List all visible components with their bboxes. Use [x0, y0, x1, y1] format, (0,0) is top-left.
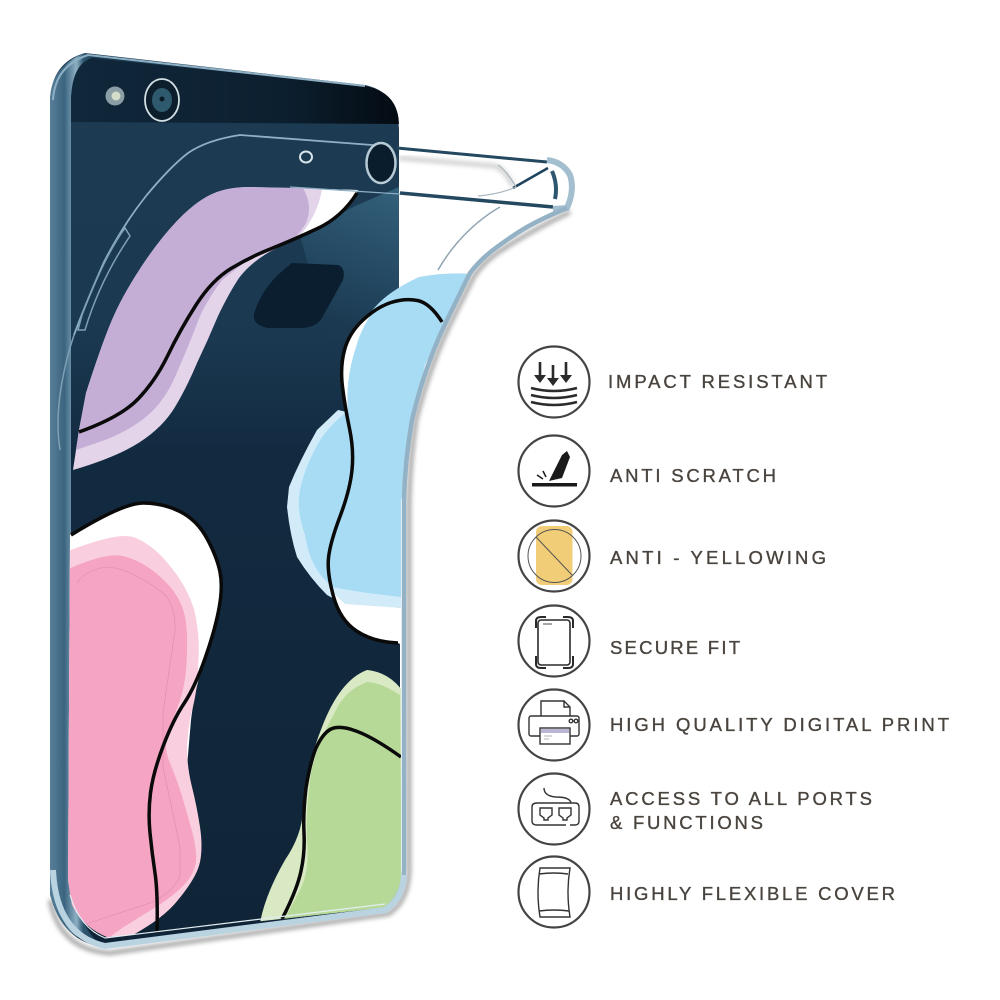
feature: high quality digital print — [518, 690, 949, 760]
feature: secure fit — [518, 606, 740, 676]
case flash hole — [300, 152, 312, 162]
camera band — [71, 58, 399, 124]
print: green shape — [260, 670, 402, 923]
label: HIGH QUALITY DIGITAL PRINT — [610, 714, 949, 735]
feature: impact resistant — [518, 346, 827, 418]
label: ANTI - YELLOWING — [610, 547, 826, 568]
feature: anti scratch — [518, 436, 776, 506]
side button outline — [78, 228, 130, 330]
label: IMPACT RESISTANT — [608, 371, 827, 392]
case drop shadow — [50, 212, 570, 953]
case camera cutout ring — [366, 143, 396, 183]
label: SECURE FIT — [610, 637, 740, 658]
icon: impact arrows — [518, 346, 590, 418]
phone side frame — [50, 53, 98, 943]
icon: printer — [518, 690, 590, 760]
print: pink shape — [68, 503, 221, 945]
icon: dual port socket — [518, 774, 590, 844]
phone back — [50, 53, 400, 948]
print: lilac shape — [73, 187, 358, 470]
icon: yellow phone crossed out — [518, 520, 590, 592]
icon: phone with corner bumpers — [518, 606, 590, 676]
icon: blade scratching a surface — [518, 436, 590, 506]
case window shadow — [399, 158, 513, 186]
camera flash — [106, 86, 124, 106]
fingerprint recess — [254, 263, 344, 328]
label: HIGHLY FLEXIBLE COVER — [610, 883, 895, 904]
clear case outline — [53, 135, 572, 946]
feature: anti yellowing — [518, 520, 826, 592]
print: blue shape — [287, 273, 472, 645]
icon: flexing cover — [518, 856, 590, 928]
label: ACCESS TO ALL PORTS — [610, 788, 872, 809]
camera lens — [145, 79, 179, 121]
phone and clear case illustration — [50, 53, 572, 948]
feature: highly flexible cover — [518, 856, 895, 928]
feature label: and functions: & FUNCTIONS — [610, 812, 763, 833]
label: ANTI SCRATCH — [610, 465, 776, 486]
feature: access to all ports — [518, 774, 872, 844]
bottom rim — [53, 870, 404, 946]
